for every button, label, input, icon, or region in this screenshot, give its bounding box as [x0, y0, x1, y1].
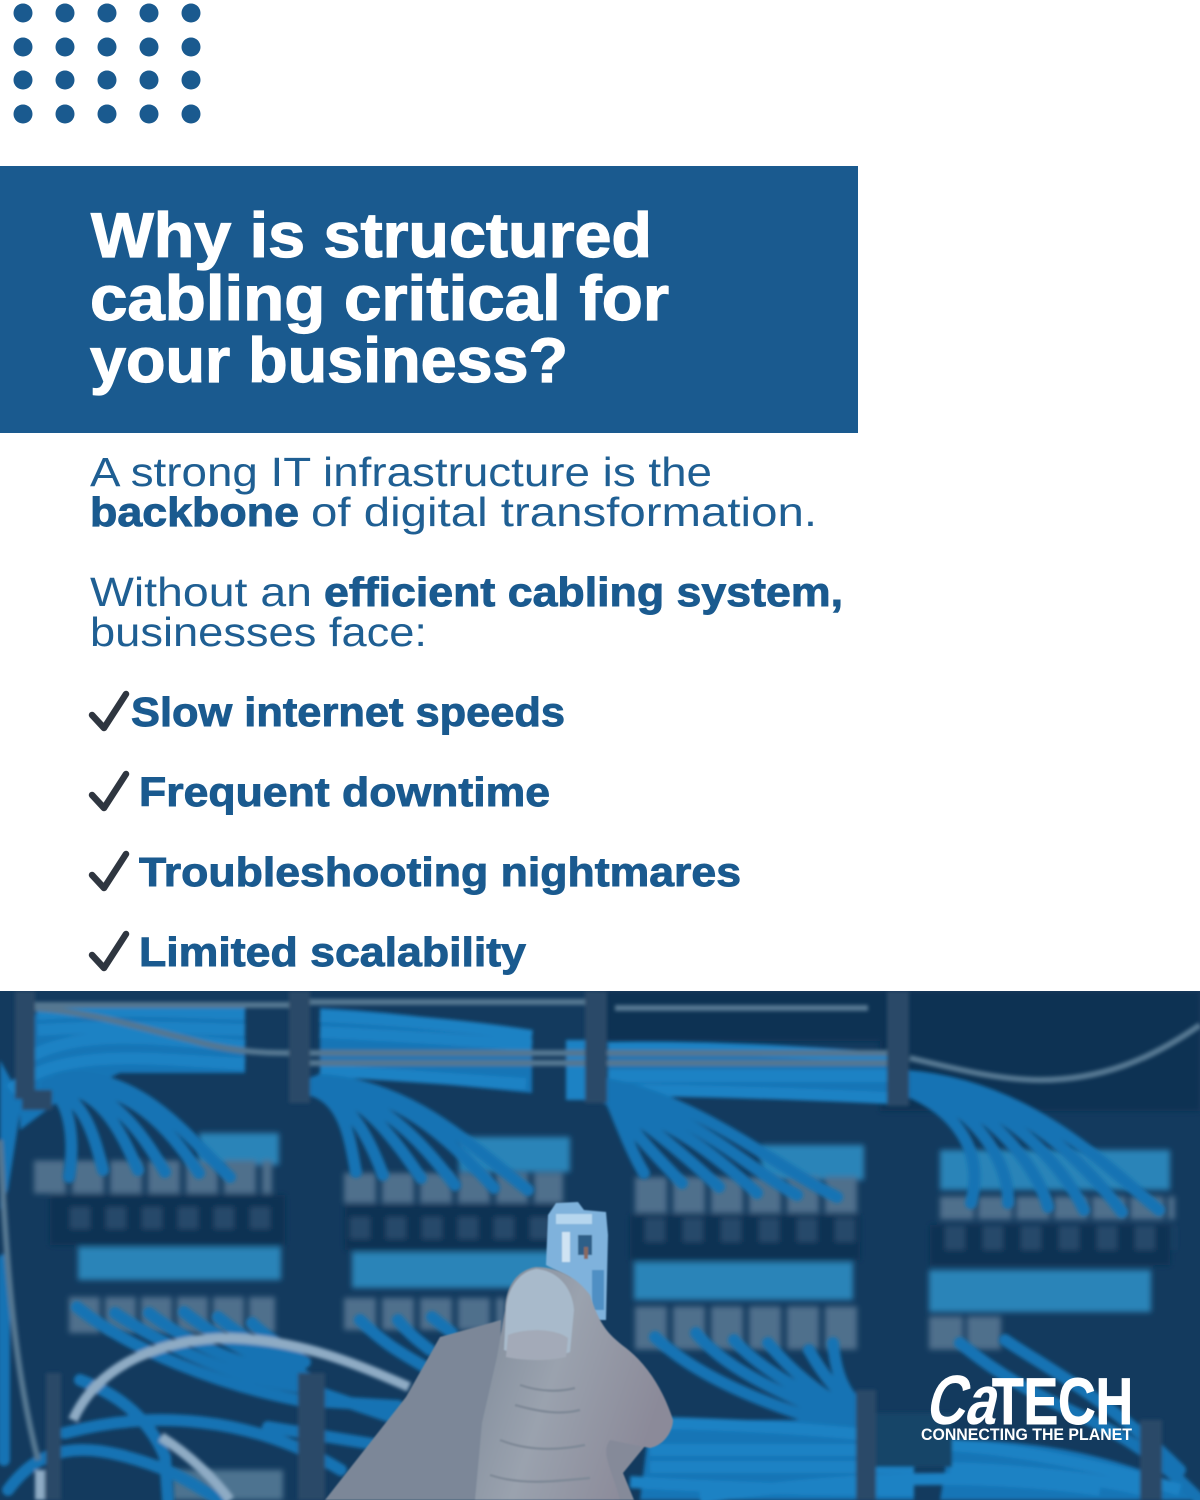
title banner	[0, 166, 858, 433]
connector plug	[546, 1202, 608, 1320]
dot grid decoration	[14, 4, 200, 124]
item: troubleshooting nightmares: Troubleshooting nightmares	[139, 849, 741, 895]
logo: CaTECH: CONNECTING THE PLANET	[921, 1426, 1132, 1444]
title banner: your business?	[90, 326, 568, 396]
item: slow internet speeds: Slow internet speeds	[131, 689, 565, 735]
intro text: of digital transformation.	[311, 489, 817, 535]
title banner: cabling critical for	[90, 264, 669, 334]
hand	[325, 1267, 673, 1500]
intro text: backbone	[90, 489, 299, 535]
title banner: Why is structured	[91, 201, 652, 271]
photo: hand holding network connector in front of patch panel	[0, 991, 1200, 1500]
intro text: A strong IT infrastructure is the	[90, 449, 712, 495]
problem statement text: efficient cabling system,	[324, 569, 843, 615]
logo: CaTECH: Ca	[920, 1362, 1010, 1440]
problem statement text: Without an	[90, 569, 312, 615]
item: frequent downtime: Frequent downtime	[139, 769, 550, 815]
item: limited scalability: Limited scalability	[139, 929, 526, 975]
problem statement text	[90, 569, 843, 655]
checklist	[92, 689, 741, 975]
intro text	[90, 449, 817, 535]
problem statement text: businesses face:	[90, 609, 427, 655]
logo: CaTECH	[922, 1375, 1132, 1440]
logo: CaTECH: TECH	[992, 1364, 1133, 1438]
cable bundle fills	[20, 1007, 245, 1130]
